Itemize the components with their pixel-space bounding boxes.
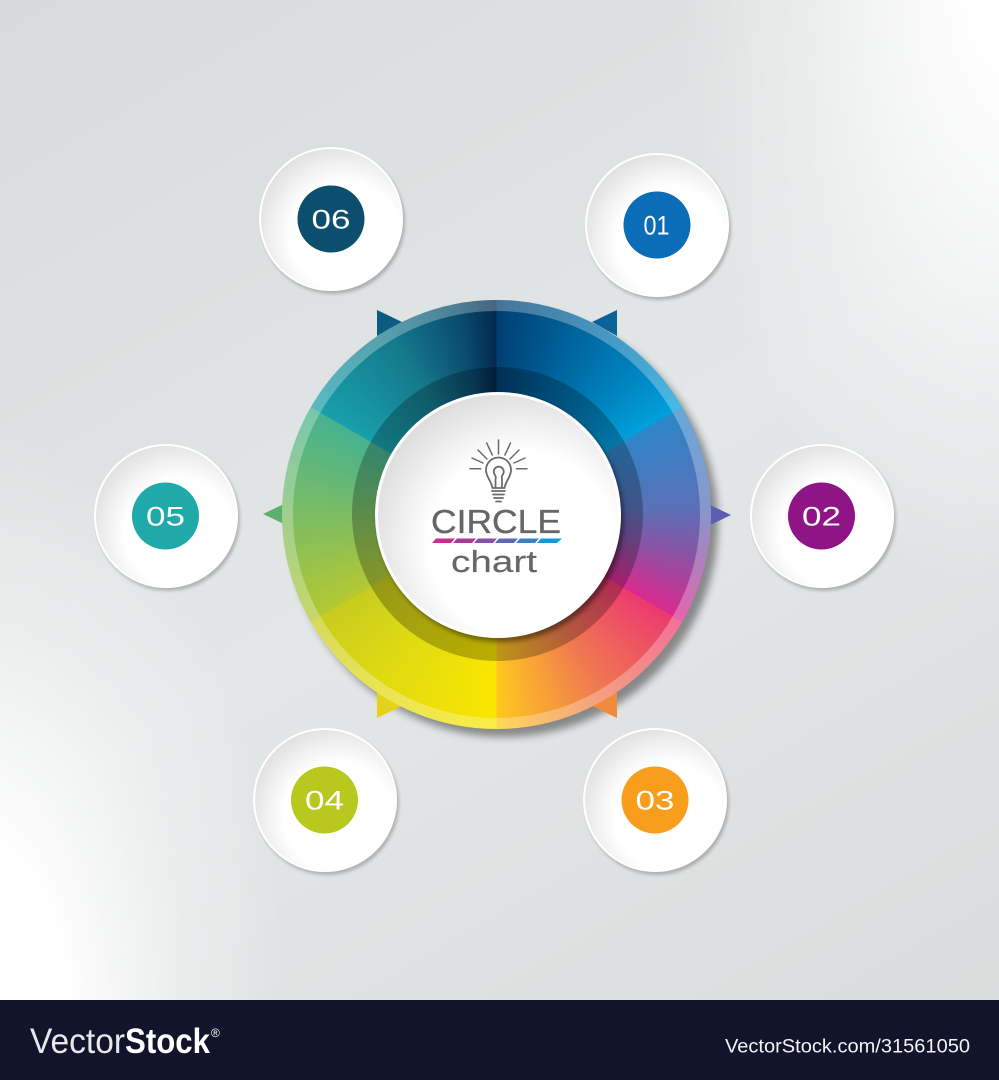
circle chart wheel [263,300,731,742]
brand logo: ® [211,1026,220,1040]
badge 03 [583,728,727,872]
badge 01: 01 [644,210,670,240]
colour bar [432,538,562,543]
subheading: chart: chart [451,544,537,579]
footer bar [0,1000,999,1080]
badge 05 [94,444,238,588]
badge 01 [585,153,729,297]
badge 05: 05 [146,502,185,532]
wheel shadow [290,309,718,737]
brand logo: Vector [30,1022,125,1061]
badge 02 [750,444,894,588]
badge 03: 03 [636,786,674,816]
inner dark ring [352,367,643,661]
badge 06: 06 [312,204,350,234]
brand logo: Stock [125,1022,210,1061]
outer rim highlight [282,300,711,729]
brand logo [30,1022,220,1061]
badge 04: 04 [305,786,344,816]
arrow markers [263,310,731,718]
colour sectors [282,300,711,729]
icon: light bulb [470,440,527,502]
badge 02: 02 [802,502,841,532]
centre plate [375,392,621,638]
badge 06 [259,147,403,291]
heading: CIRCLE: CIRCLE [431,503,561,540]
image id: VectorStock.com/31561050 [725,1036,970,1058]
badge 04 [253,728,397,872]
centre logo [431,439,562,579]
